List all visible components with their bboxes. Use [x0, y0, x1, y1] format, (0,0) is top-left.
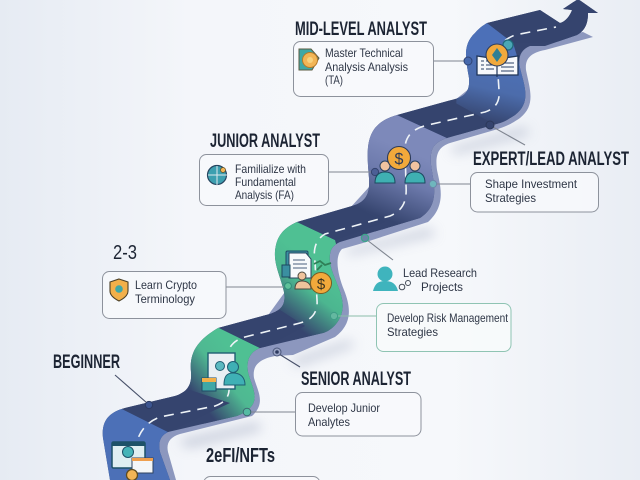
connector: junior [328, 168, 379, 176]
connector: mid-level [433, 57, 472, 65]
icon: book with ethereum coin [477, 40, 518, 77]
icon: monitor with coin [112, 442, 153, 480]
connector: lead research [361, 234, 393, 260]
callout: 2-3 [102, 242, 226, 318]
icon: two people with dollar coin [375, 146, 425, 183]
text: Lead Research [403, 266, 477, 280]
dark junctions sharp edges [120, 390, 230, 432]
icon: two people with dollar coin: $ [395, 151, 404, 168]
text: Fundamental [235, 175, 296, 189]
connector: 2-3 [226, 283, 291, 289]
text: Terminology [135, 292, 195, 306]
connector: expert [486, 121, 525, 145]
section: lavender [352, 115, 446, 232]
icon: shield [110, 279, 128, 301]
connector: develop junior [243, 408, 295, 416]
callout: DeFi/NFTs [204, 445, 320, 480]
callout: senior analyst [296, 369, 421, 436]
icon: document with person and dollar coin [282, 251, 332, 294]
connector: beginner [115, 375, 153, 409]
callout: develop risk management [376, 304, 511, 352]
heading: JUNIOR ANALYST [210, 131, 320, 152]
heading: beginner: BEGINNER [53, 352, 120, 373]
icon: globe [208, 166, 227, 185]
connector: senior heading [273, 348, 300, 367]
text: Analytes [308, 415, 350, 429]
text: Develop Junior [308, 401, 380, 415]
connector: shape investment [429, 180, 470, 188]
icon: report with analyst [202, 353, 245, 391]
box [102, 272, 226, 318]
icon: researcher [373, 266, 410, 291]
box [294, 42, 434, 96]
heading: SENIOR ANALYST [301, 369, 411, 390]
box [200, 154, 328, 206]
text: Familialize with [235, 162, 306, 176]
box [296, 392, 421, 436]
heading: 2-3 [113, 242, 137, 264]
box [204, 476, 320, 480]
connector: risk management [330, 312, 376, 320]
box [376, 304, 511, 352]
text: Strategies [485, 191, 536, 205]
callout: mid-level analyst [294, 19, 434, 96]
section: green lower [180, 328, 260, 424]
section: green upper [262, 222, 343, 340]
text: Projects [421, 280, 463, 294]
icon: document with person and dollar coin: $ [317, 276, 326, 293]
text: Shape Investment [485, 177, 578, 191]
text: Develop Risk Management [387, 311, 509, 325]
text: Analysis (FA) [235, 188, 294, 202]
section: blue upper [456, 23, 526, 135]
callout: lead research projects [373, 266, 477, 294]
road center dashes [132, 27, 556, 470]
callout: expert/lead analyst [470, 149, 629, 212]
text: Analysis Analysis [325, 60, 408, 74]
connector lines and nodes [115, 57, 525, 416]
text: (TA) [325, 73, 343, 87]
text: Strategies [387, 325, 438, 339]
road soft shadows [178, 127, 530, 448]
box [470, 172, 598, 212]
callout: junior analyst [200, 131, 328, 206]
heading: MID-LEVEL ANALYST [295, 19, 427, 40]
icon: gold coin tag [299, 49, 319, 70]
text: Learn Crypto [135, 278, 197, 292]
section: blue start [102, 409, 170, 480]
text: Master Technical [325, 46, 403, 60]
heading: 2eFI/NFTs [206, 445, 275, 467]
road side strip [150, 32, 593, 480]
